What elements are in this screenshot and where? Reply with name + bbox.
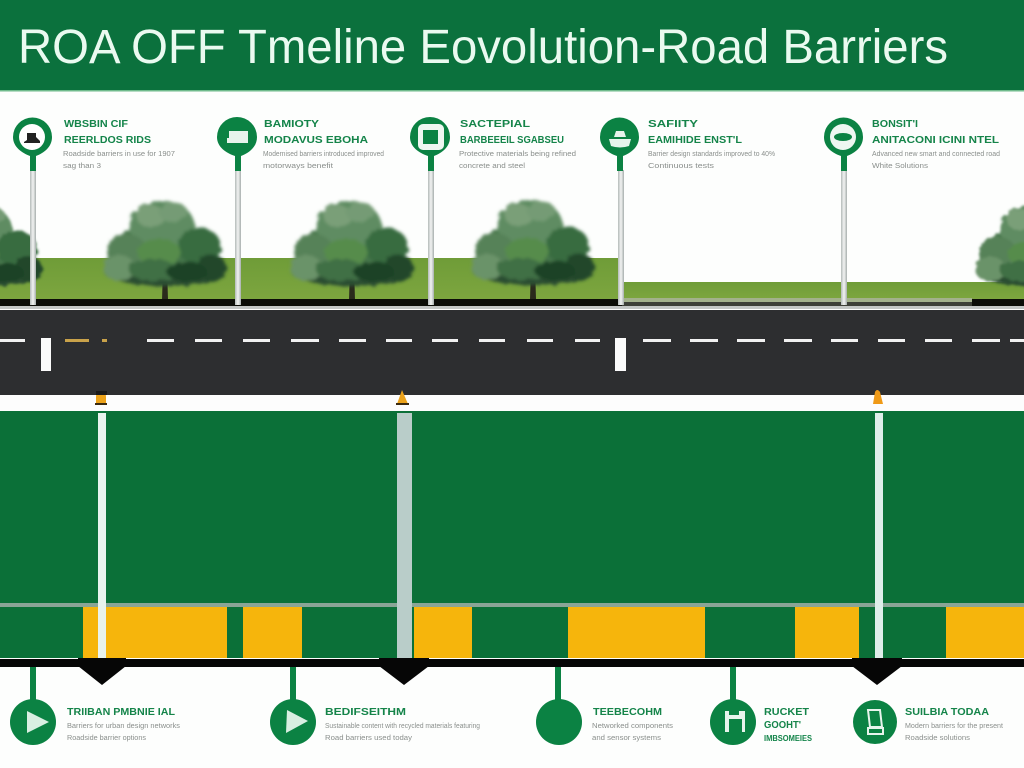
text: GOOHT'	[764, 720, 801, 731]
milestone 2 text: motorways benefit	[263, 163, 333, 170]
grass verge	[0, 258, 1024, 300]
milestone 1 text	[63, 119, 175, 170]
milestone 4 top	[600, 117, 775, 305]
text	[764, 707, 813, 743]
milestone 2 text	[263, 119, 384, 170]
text	[592, 707, 674, 742]
text: TEEBECOHM	[593, 707, 662, 718]
black road edge	[0, 298, 1024, 306]
milestone 1 bottom	[10, 667, 181, 745]
milestone 5 text: ANITACONI ICINI NTEL	[872, 135, 999, 146]
milestone 3 text	[459, 119, 576, 170]
text: TRIIBAN PMBNIE IAL	[67, 707, 175, 718]
lane dashes	[0, 339, 1024, 342]
milestone 1 top	[13, 118, 175, 305]
text: Modern barriers for the present	[905, 723, 1003, 730]
milestone 4 text: EAMIHIDE ENST'L	[648, 135, 742, 146]
icon: eco car	[834, 133, 852, 141]
text: Roadside solutions	[905, 735, 971, 742]
milestone 3 text: SACTEPIAL	[460, 119, 530, 130]
text: BEDIFSEITHM	[325, 707, 406, 718]
text: and sensor systems	[592, 735, 662, 742]
icon: vehicle	[24, 133, 40, 143]
text	[905, 707, 1003, 742]
milestone 5 text: White Solutions	[872, 163, 929, 170]
tan dashes	[65, 339, 107, 342]
milestone 1 text: Roadside barriers in use for 1907	[63, 151, 175, 158]
milestone 4 text: Barrier design standards improved to 40%	[648, 151, 775, 158]
icon: document	[868, 710, 883, 734]
milestone 4 text: Continuous tests	[648, 163, 715, 170]
text: Barriers for urban design networks	[67, 723, 181, 730]
milestone 1 text: REERLDOS RIDS	[64, 135, 151, 146]
text: SUILBIA TODAA	[905, 707, 989, 718]
milestone 5 top	[824, 118, 1000, 305]
trees	[0, 200, 1024, 300]
title: ROA OFF Tmeline Eovolution-Road Barriers	[18, 21, 948, 74]
text: Sustainable content with recycled materials featuring	[325, 723, 480, 730]
milestone 5 text: BONSIT'I	[872, 119, 918, 130]
text: RUCKET	[764, 707, 809, 718]
milestone 5 text	[872, 119, 1000, 170]
icon: play	[27, 711, 49, 733]
icon: gate	[725, 711, 745, 732]
warning cones	[95, 390, 883, 405]
icon: play	[286, 710, 308, 733]
milestone 3 text: Protective materials being refined	[459, 151, 576, 158]
icon: barrier block	[227, 131, 248, 143]
milestone 2 text: BAMIOTY	[264, 119, 319, 130]
barrier posts	[98, 413, 883, 660]
milestone 3 top	[410, 117, 576, 305]
milestone 5 bottom	[853, 700, 1003, 744]
text	[325, 707, 480, 742]
white kerb	[0, 395, 1024, 411]
text	[67, 707, 181, 742]
white road blocks	[41, 338, 51, 371]
milestone 1 text: sag than 3	[63, 163, 101, 170]
green barrier panel	[0, 411, 1024, 658]
text: Networked components	[592, 723, 674, 730]
icon: safety car	[609, 131, 631, 148]
milestone 4 bottom	[710, 667, 813, 745]
text: IMBSOMEIES	[764, 734, 813, 743]
title banner	[0, 0, 1024, 92]
milestone 2 text: MODAVUS EBOHA	[264, 135, 368, 146]
milestone 2 text: Modernised barriers introduced improved	[263, 151, 384, 158]
milestone 4 text	[648, 119, 775, 170]
text: Road barriers used today	[325, 735, 413, 742]
text: Roadside barrier options	[67, 735, 147, 742]
milestone 2 top	[217, 117, 384, 305]
icon: sign	[423, 130, 438, 144]
milestone 3 text: concrete and steel	[459, 163, 526, 170]
yellow segments	[83, 607, 1024, 658]
milestone 3 bottom	[536, 667, 674, 745]
milestone 3 text: BARBEEEIL SGABSEU	[460, 135, 564, 146]
milestone 1 text: WBSBIN CIF	[64, 119, 128, 130]
milestone 2 bottom	[270, 667, 480, 745]
milestone 4 text: SAFIITY	[648, 119, 698, 130]
road	[0, 306, 1024, 395]
black base rail	[0, 658, 1024, 685]
milestone 5 text: Advanced new smart and connected road	[872, 151, 1000, 158]
